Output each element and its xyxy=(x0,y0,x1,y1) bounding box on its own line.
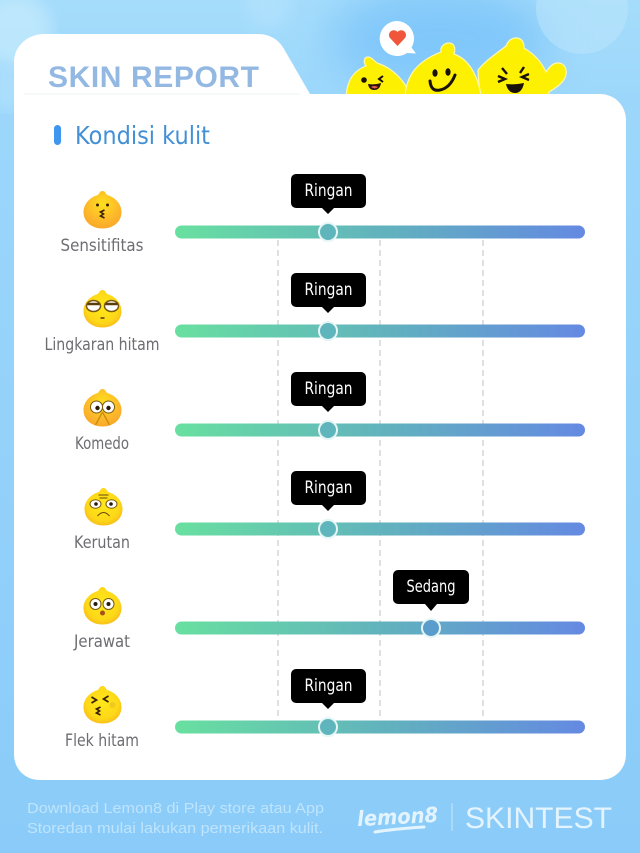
footer text xyxy=(27,800,324,837)
slider bar xyxy=(175,324,585,338)
tooltip: Ringan: Ringan xyxy=(304,379,352,399)
label: Komedo xyxy=(75,434,129,453)
label: Kerutan xyxy=(74,533,130,552)
tooltip: Ringan xyxy=(291,174,366,214)
footer text: Download Lemon8 di Play store atau App xyxy=(27,800,324,817)
slider bar xyxy=(175,622,585,634)
tooltip: Ringan xyxy=(291,669,366,709)
speech bubble with heart xyxy=(380,21,416,56)
knob xyxy=(319,718,337,736)
knob xyxy=(319,223,337,241)
row: Kerutan xyxy=(74,471,585,552)
tooltip: Ringan: Ringan xyxy=(304,676,352,696)
lemon middle xyxy=(405,43,482,100)
tooltip: Sedang xyxy=(393,570,469,611)
lemon right xyxy=(478,38,566,100)
tooltip: Sedang: Sedang xyxy=(406,577,456,597)
tooltip: Ringan: Ringan xyxy=(304,478,352,498)
lemon left xyxy=(346,57,407,100)
row: Lingkaran hitam xyxy=(44,273,585,354)
tooltip: Ringan xyxy=(291,471,366,511)
row: Sensitifitas xyxy=(60,174,585,255)
divider xyxy=(451,803,453,831)
icon: hands on face xyxy=(84,389,122,426)
footer text: Storedan mulai lakukan pemerikaan kulit. xyxy=(27,820,323,837)
title: SKIN REPORT: SKIN REPORT xyxy=(48,61,259,94)
tooltip: Ringan xyxy=(291,273,366,313)
icon: surprised face xyxy=(84,587,122,624)
tooltip: Ringan: Ringan xyxy=(304,181,352,201)
slider bar xyxy=(175,522,585,536)
knob xyxy=(422,619,440,637)
row: Jerawat xyxy=(73,570,585,651)
knob xyxy=(319,421,337,439)
knob xyxy=(319,322,337,340)
icon: wrinkled face xyxy=(84,488,122,526)
logo: Lemon8: lemon8 xyxy=(357,803,439,831)
slider bar xyxy=(175,226,585,238)
row: Komedo xyxy=(75,372,585,453)
label: Flek hitam xyxy=(65,731,139,750)
label: Jerawat xyxy=(73,632,130,651)
character group: lemons xyxy=(346,21,566,100)
slider bar xyxy=(175,424,585,436)
icon: tired eyes face xyxy=(84,290,122,328)
dashed guide lines xyxy=(278,240,483,720)
label: Sensitifitas xyxy=(60,236,144,255)
knob xyxy=(319,520,337,538)
row: Flek hitam xyxy=(65,669,585,750)
heading: Kondisi kulit: Kondisi kulit xyxy=(75,121,210,150)
label: Lingkaran hitam xyxy=(44,335,160,354)
icon: kissing face xyxy=(84,191,122,228)
slider bar xyxy=(175,720,585,734)
logo: SKINTEST: SKINTEST xyxy=(465,802,612,835)
tooltip: Ringan: Ringan xyxy=(304,280,352,300)
icon: squinting face xyxy=(84,686,122,724)
tooltip: Ringan xyxy=(291,372,366,412)
